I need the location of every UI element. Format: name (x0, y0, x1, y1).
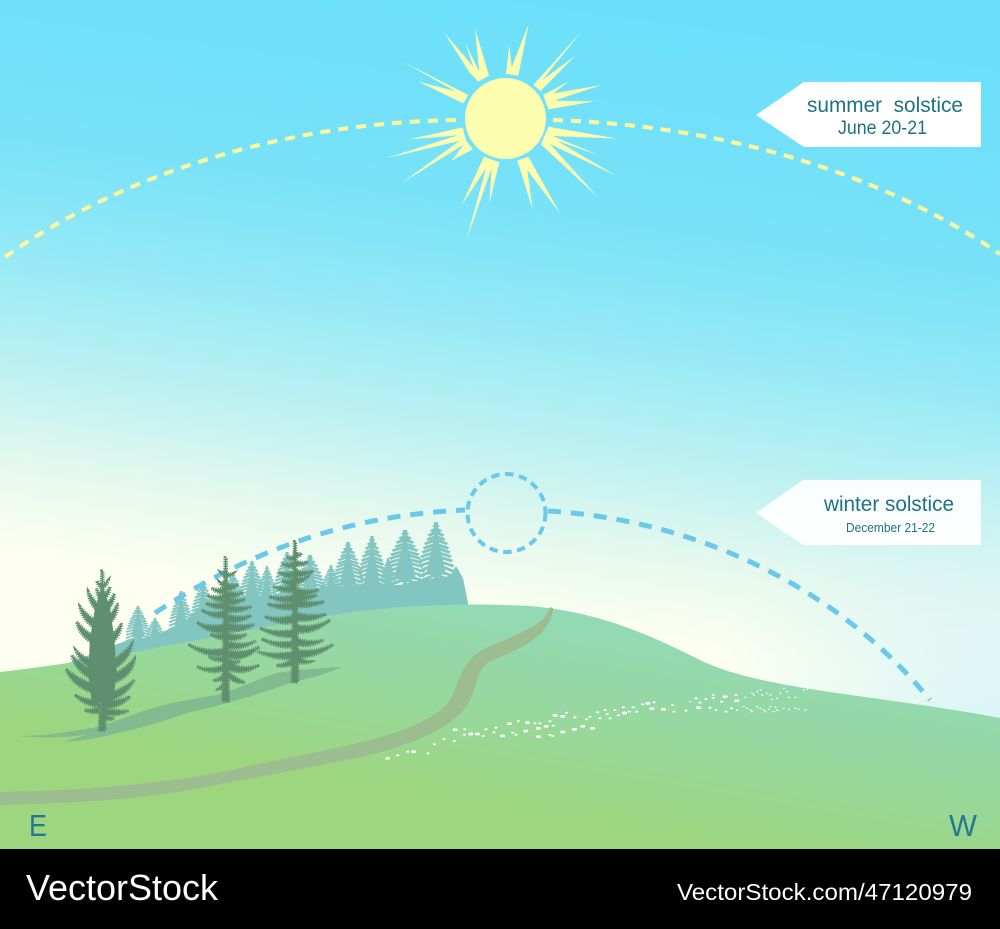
pine tree: left (66, 571, 134, 731)
callout: winter solstice: winter solstice (823, 493, 954, 516)
callout: winter solstice: December 21-22 (846, 520, 935, 535)
label: west: W (949, 808, 978, 843)
label: east: E (29, 808, 47, 843)
path across the hill (0, 607, 553, 805)
hill (0, 605, 1000, 850)
callout: summer solstice: June 20-21 (838, 118, 927, 139)
callout: summer solstice (756, 82, 981, 147)
white meadow flowers (387, 686, 838, 758)
distant forest silhouette (66, 522, 468, 670)
pine tree: right (257, 542, 333, 682)
footer bar: VectorStock.com/47120979 (677, 879, 972, 905)
footer bar: VectorStock (26, 867, 219, 908)
pine tree: middle (188, 558, 259, 702)
callout: winter solstice (756, 480, 981, 545)
winter solstice sun path (155, 510, 930, 700)
callout: summer solstice: summer solstice (807, 94, 963, 117)
summer solstice sun path (5, 120, 1000, 257)
icon: summer sun (386, 24, 617, 239)
icon: winter sun outline (468, 474, 546, 552)
footer bar (0, 849, 1000, 929)
tree shadows (18, 667, 342, 742)
